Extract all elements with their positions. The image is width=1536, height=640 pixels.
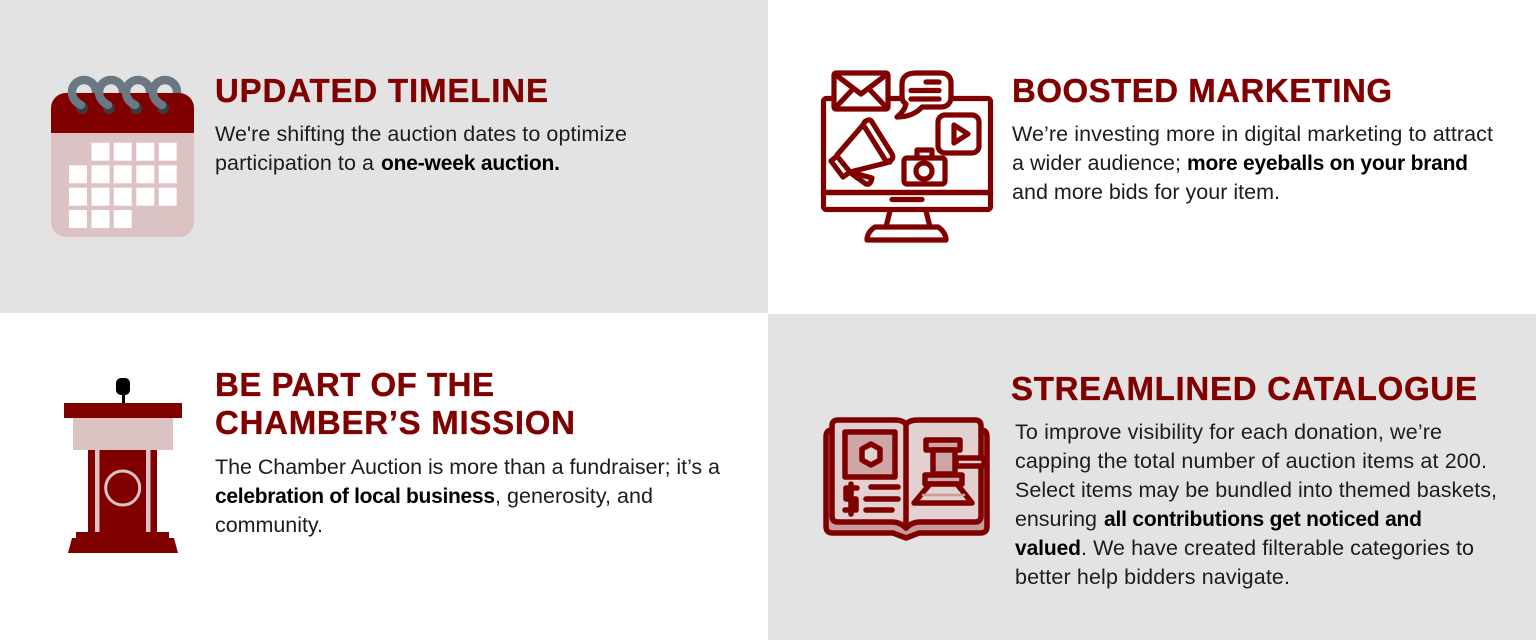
text block: boosted marketing body <box>1012 122 1493 204</box>
text block: chamber's mission body: , generosity, and <box>495 484 653 508</box>
panel: streamlined catalogue background <box>768 314 1536 640</box>
text block: streamlined catalogue body: . We have created filterable categories to <box>1081 536 1474 560</box>
text block: updated timeline body: one-week auction. <box>381 152 560 175</box>
text block: updated timeline body: participation to a <box>215 151 374 175</box>
icon: marketing monitor <box>824 73 990 240</box>
text block: updated timeline body <box>215 122 627 175</box>
text block: streamlined catalogue body: capping the total number of auction items at 200. <box>1015 449 1487 473</box>
panel: updated timeline background <box>0 0 768 313</box>
heading: be part of the chamber's mission: CHAMBER’S MISSION <box>215 404 575 441</box>
text block: boosted marketing body: We’re investing more in digital marketing to attract <box>1012 122 1493 146</box>
heading: updated timeline: UPDATED TIMELINE <box>215 72 548 109</box>
text block: boosted marketing body: a wider audience; <box>1012 151 1181 175</box>
text block: streamlined catalogue body: better help bidders navigate. <box>1015 565 1290 589</box>
icon: auction book with gavel <box>826 420 987 538</box>
text block: streamlined catalogue body: valued <box>1015 537 1081 560</box>
text block: chamber's mission body <box>215 455 720 537</box>
text block: streamlined catalogue body: all contributions get noticed and <box>1104 508 1422 531</box>
text block: streamlined catalogue body: ensuring <box>1015 507 1097 531</box>
panel: updated timeline <box>51 72 627 237</box>
text block: boosted marketing body: and more bids for your item. <box>1012 180 1280 204</box>
heading: streamlined catalogue: STREAMLINED CATALOGUE <box>1011 370 1477 407</box>
heading: be part of the chamber's mission: BE PART OF THE <box>215 366 494 403</box>
icon: calendar <box>51 80 194 237</box>
panel: streamlined catalogue <box>826 370 1497 589</box>
panel: chamber's mission <box>64 366 720 553</box>
text block: updated timeline body: We're shifting the auction dates to optimize <box>215 122 627 146</box>
panel: boosted marketing <box>824 72 1493 240</box>
text block: chamber's mission body: The Chamber Auction is more than a fundraiser; it’s a <box>215 455 720 479</box>
text block: chamber's mission body: celebration of local business <box>215 485 495 508</box>
text block: chamber's mission body: community. <box>215 513 323 537</box>
text block: boosted marketing body: more eyeballs on your brand <box>1187 152 1468 175</box>
text block: streamlined catalogue body: To improve visibility for each donation, we’re <box>1015 420 1442 444</box>
icon: podium <box>64 378 182 553</box>
text block: streamlined catalogue body <box>1015 420 1497 589</box>
heading: boosted marketing: BOOSTED MARKETING <box>1012 72 1392 109</box>
heading: be part of the chamber's mission <box>215 366 575 441</box>
text block: streamlined catalogue body: Select items may be bundled into themed baskets, <box>1015 478 1497 502</box>
